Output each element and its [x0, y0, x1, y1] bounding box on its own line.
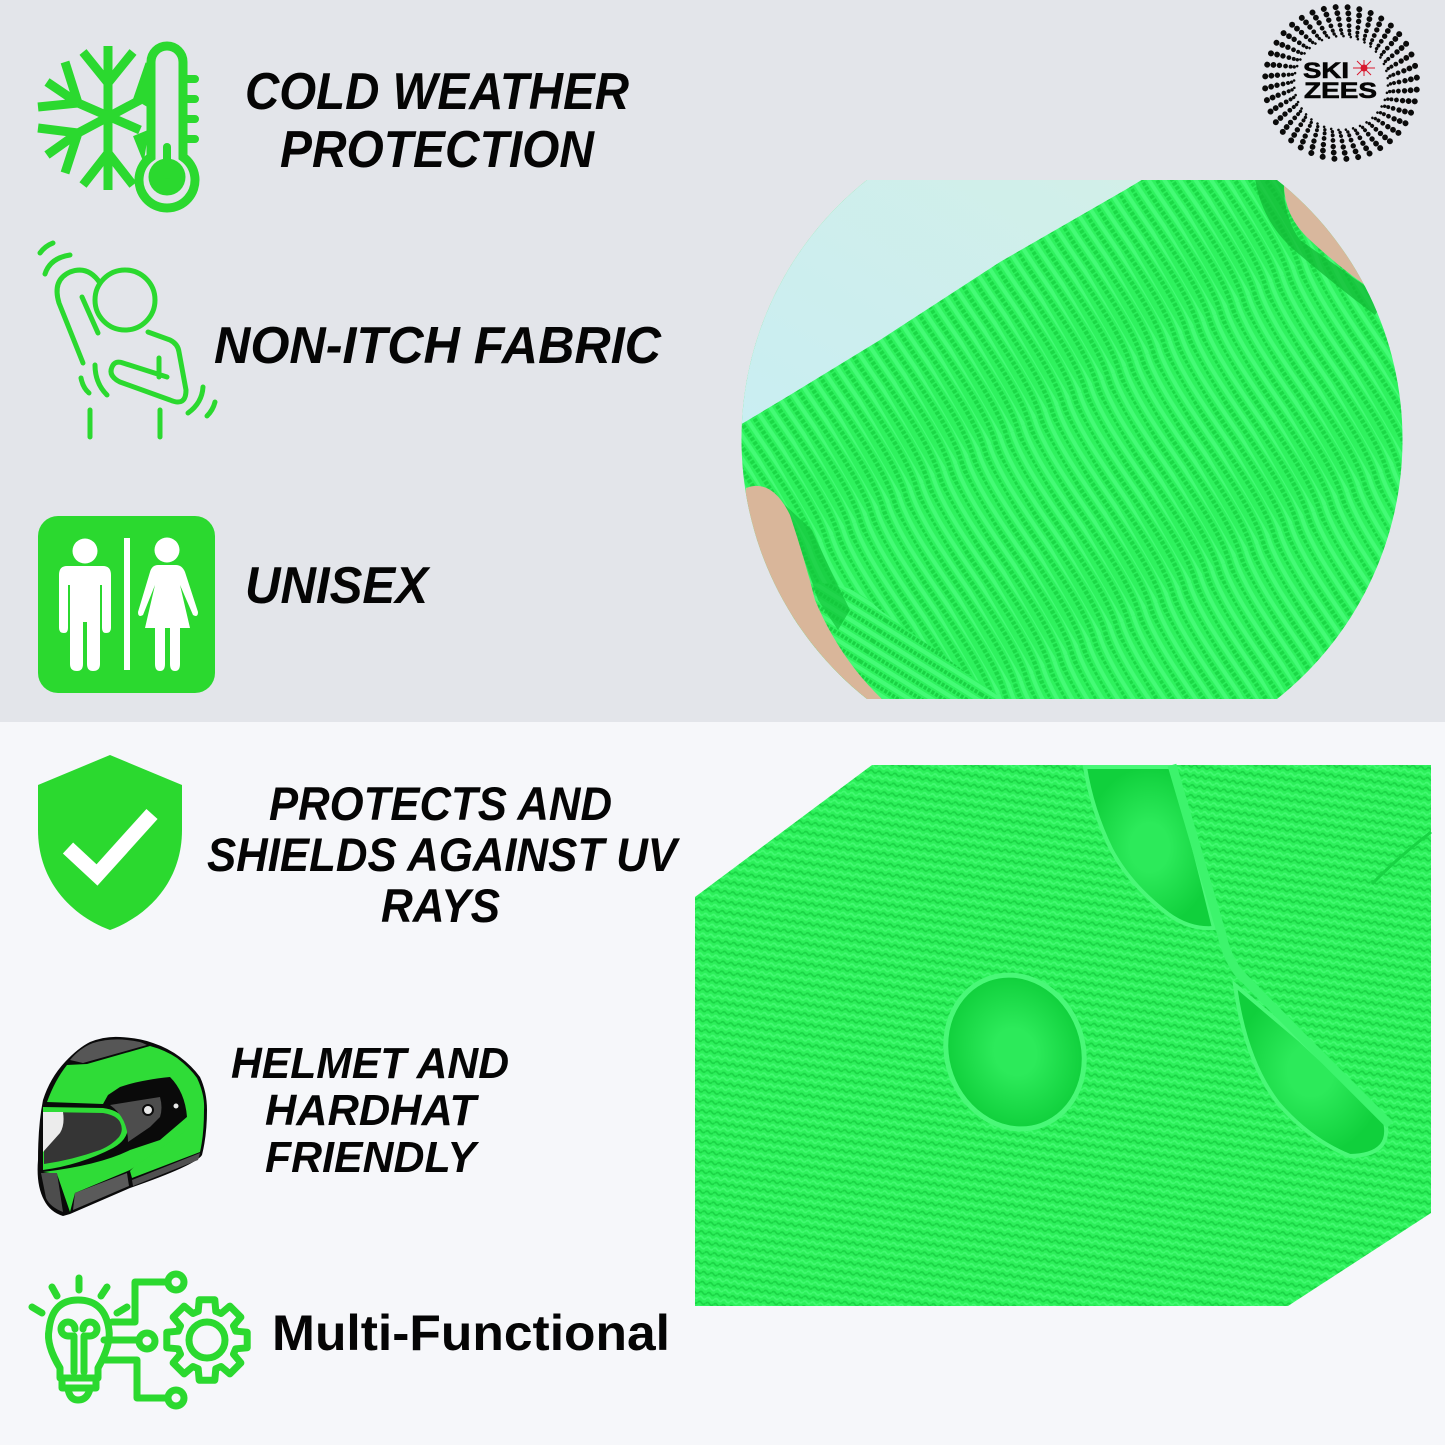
eye hole: left: [924, 955, 1106, 1149]
heading: helmet and hardhat friendly: FRIENDLY: [265, 1133, 480, 1182]
heading: uv protection: SHIELDS AGAINST UV: [207, 828, 680, 881]
heading: multi-functional: Multi-Functional: [272, 1305, 670, 1361]
fabric crease: right: [1372, 832, 1431, 884]
icon: itching person: [40, 243, 215, 437]
heading: unisex: UNISEX: [245, 557, 431, 615]
background: top panel: [0, 0, 1445, 722]
icon: shield with check mark: [38, 755, 182, 930]
lower-left rib direction: [792, 584, 998, 699]
heading: cold weather protection: [245, 63, 629, 179]
shadow: beside bottom finger: [785, 505, 850, 630]
logo: ski zees: [1258, 0, 1424, 166]
background: bottom panel: [0, 722, 1445, 1445]
heading: helmet and hardhat friendly: [231, 1039, 509, 1182]
heading: helmet and hardhat friendly: HARDHAT: [265, 1086, 479, 1135]
heading: uv protection: PROTECTS AND: [269, 777, 612, 830]
icon: light bulb circuit and gear: [32, 1274, 247, 1406]
finger: bottom left: [746, 486, 882, 699]
photo background: pale sky area: [735, 175, 1150, 425]
logo: ski zees: ZEES: [1304, 78, 1377, 103]
heading: uv protection: [207, 777, 680, 932]
icon: green motorcycle helmet: [38, 1037, 207, 1216]
photo: green balaclava with eye and mouth holes: [695, 765, 1431, 1306]
heading: helmet and hardhat friendly: HELMET AND: [231, 1039, 509, 1088]
heading: non-itch fabric: NON-ITCH FABRIC: [214, 317, 662, 375]
shadow: beside top finger: [1255, 178, 1385, 315]
knit ridge: [1172, 765, 1390, 1125]
icon: unisex sign: [38, 516, 215, 693]
heading: cold weather protection: COLD WEATHER: [245, 63, 629, 121]
mouth hole: lower: [1235, 985, 1386, 1156]
heading: cold weather protection: PROTECTION: [280, 121, 595, 179]
photo: knit fabric close-up in circle: [730, 175, 1410, 705]
icon: snowflake and thermometer: [38, 46, 195, 208]
finger: top right: [1284, 186, 1364, 284]
heading: uv protection: RAYS: [381, 879, 500, 932]
eye hole: upper: [1085, 767, 1214, 928]
logo: ski zees: SKI: [1303, 58, 1349, 83]
